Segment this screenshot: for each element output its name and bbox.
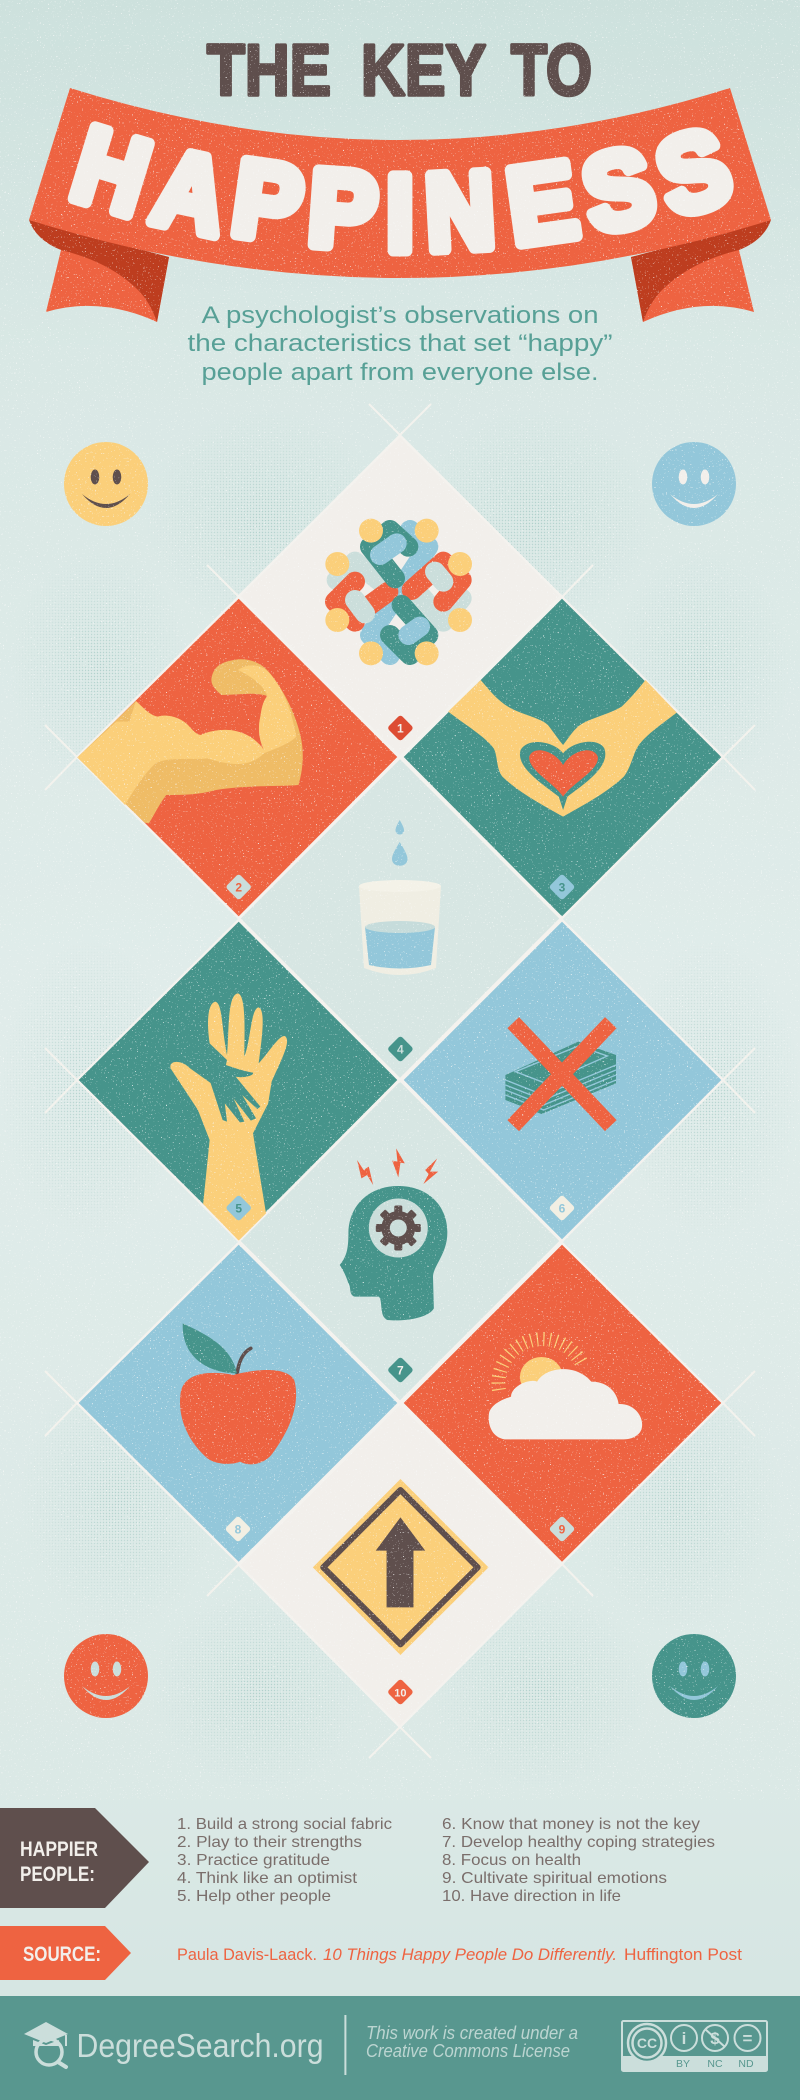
ribbon folds [29, 220, 771, 322]
label arrow: happier people: PEOPLE: [20, 1863, 95, 1886]
subtitle [188, 302, 612, 386]
license text: Creative Commons License [366, 2041, 570, 2061]
icon: head with gear and bolts [340, 1148, 447, 1320]
banner ribbon [29, 88, 771, 322]
logo wordmark: DegreeSearch.org [76, 2027, 324, 2064]
panel 2: strengths [77, 597, 399, 918]
badge 3 [549, 874, 575, 900]
label arrow: happier people: HAPPIER [20, 1838, 98, 1861]
cc badge [622, 2021, 767, 2071]
ribbon front [29, 88, 771, 278]
smiley: blue [652, 442, 736, 526]
cc badge: NC [707, 2058, 723, 2070]
badge 9 [549, 1516, 575, 1542]
list: column 2: 6. Know that money is not the key [442, 1816, 700, 1833]
license text: This work is created under a [366, 2023, 578, 2043]
source citation [177, 1946, 742, 1964]
divider [344, 2015, 346, 2075]
list: column 2: 8. Focus on health [442, 1852, 581, 1869]
panel 7: coping [239, 1080, 561, 1402]
badge 5: 5 [235, 1202, 242, 1216]
badge 1 [387, 715, 414, 741]
panel 5: help [77, 920, 399, 1241]
cc badge: ND [738, 2058, 754, 2070]
heading: happiness: I [386, 153, 414, 274]
icon: crossed out money [505, 1023, 616, 1126]
smiley: yellow [64, 442, 148, 526]
list: column 1: 3. Practice gratitude [177, 1852, 330, 1869]
badge 7 [387, 1357, 414, 1383]
list: column 1: 5. Help other people [177, 1888, 331, 1905]
subtitle: the characteristics that set “happy” [188, 330, 612, 357]
smiley: red [64, 1634, 148, 1718]
heading: happiness: P [226, 137, 310, 266]
list: column 2 [442, 1816, 715, 1905]
icon: woven knot [325, 519, 472, 665]
label arrow: happier people [0, 1808, 149, 1908]
icon: apple [180, 1323, 296, 1464]
panel 8: health [77, 1243, 399, 1564]
panel 4: gratitude [239, 758, 561, 1080]
badge 5 [225, 1195, 252, 1221]
badge 6: 6 [559, 1202, 566, 1216]
list: column 1 [177, 1816, 392, 1905]
cc badge: = [743, 2029, 753, 2048]
panel 3: gratitude hands [402, 597, 723, 918]
panel 9: spiritual [402, 1243, 723, 1564]
badge 8: 8 [235, 1522, 242, 1536]
subtitle: A psychologist’s observations on [202, 302, 598, 329]
heading: happiness: S [644, 105, 744, 240]
badge 2 [225, 874, 252, 900]
cc badge: CC [637, 2035, 657, 2051]
badge 6 [549, 1195, 575, 1221]
cc badge: i [682, 2029, 686, 2048]
heading: happiness [60, 103, 744, 274]
cc badge: BY [676, 2058, 690, 2070]
icon: hands forming heart [448, 680, 677, 817]
list: column 2: 10. Have direction in life [442, 1888, 621, 1905]
logo icon: graduation cap and magnifier [24, 2022, 68, 2067]
badge 4: 4 [397, 1042, 404, 1056]
panel 1: social fabric [239, 436, 561, 757]
list: column 1: 4. Think like an optimist [177, 1870, 358, 1887]
heading: happiness: N [423, 149, 498, 273]
title: the key to: TO [511, 31, 592, 111]
badge 4 [387, 1036, 414, 1062]
heading: happiness: H [60, 103, 163, 239]
panel 6: money [402, 920, 723, 1241]
badge 8 [225, 1516, 251, 1542]
license text [366, 2023, 578, 2061]
badge 2: 2 [235, 880, 242, 894]
list: column 1: 2. Play to their strengths [177, 1834, 362, 1851]
badge 10 [387, 1679, 414, 1705]
title: the key to: THE [207, 31, 331, 111]
cc badge: $ [710, 2029, 720, 2048]
list: column 2: 9. Cultivate spiritual emotions [442, 1870, 667, 1887]
list: column 2: 7. Develop healthy coping strategies [442, 1834, 715, 1851]
corner whiskers [45, 404, 755, 1758]
footer band [0, 1996, 800, 2100]
number badges [225, 715, 575, 1705]
subtitle: people apart from everyone else. [202, 359, 598, 386]
title: the key to [207, 31, 592, 111]
ribbon tails [46, 250, 754, 322]
icon: water glass and drops [359, 820, 441, 975]
icon: sun and cloud [489, 1339, 642, 1439]
source citation: 10 Things Happy People Do Differently. [323, 1946, 617, 1964]
source citation: Huffington Post [624, 1946, 742, 1964]
list: column 1: 1. Build a strong social fabric [177, 1816, 392, 1833]
icon: road sign with arrow [313, 1479, 488, 1655]
source citation: Paula Davis-Laack. [177, 1946, 317, 1964]
panel 10: direction [239, 1404, 561, 1727]
heading: happiness: P [305, 147, 381, 272]
label arrow: source [0, 1926, 131, 1980]
badge 10: 10 [394, 1688, 407, 1700]
badge 3: 3 [559, 880, 566, 894]
heading: happiness: S [573, 125, 664, 257]
label arrow: source: SOURCE: [23, 1943, 101, 1966]
title: the key to: KEY [361, 31, 486, 111]
badge 7: 7 [397, 1364, 404, 1378]
badge 1: 1 [397, 722, 404, 736]
icon: flexed arm [77, 659, 303, 823]
panel: diamonds grid [77, 436, 723, 1727]
heading: happiness: E [500, 139, 584, 268]
badge 9: 9 [559, 1522, 566, 1536]
heading: happiness: A [144, 126, 237, 258]
smiley: teal [652, 1634, 736, 1718]
icon: helping hands [170, 993, 287, 1241]
